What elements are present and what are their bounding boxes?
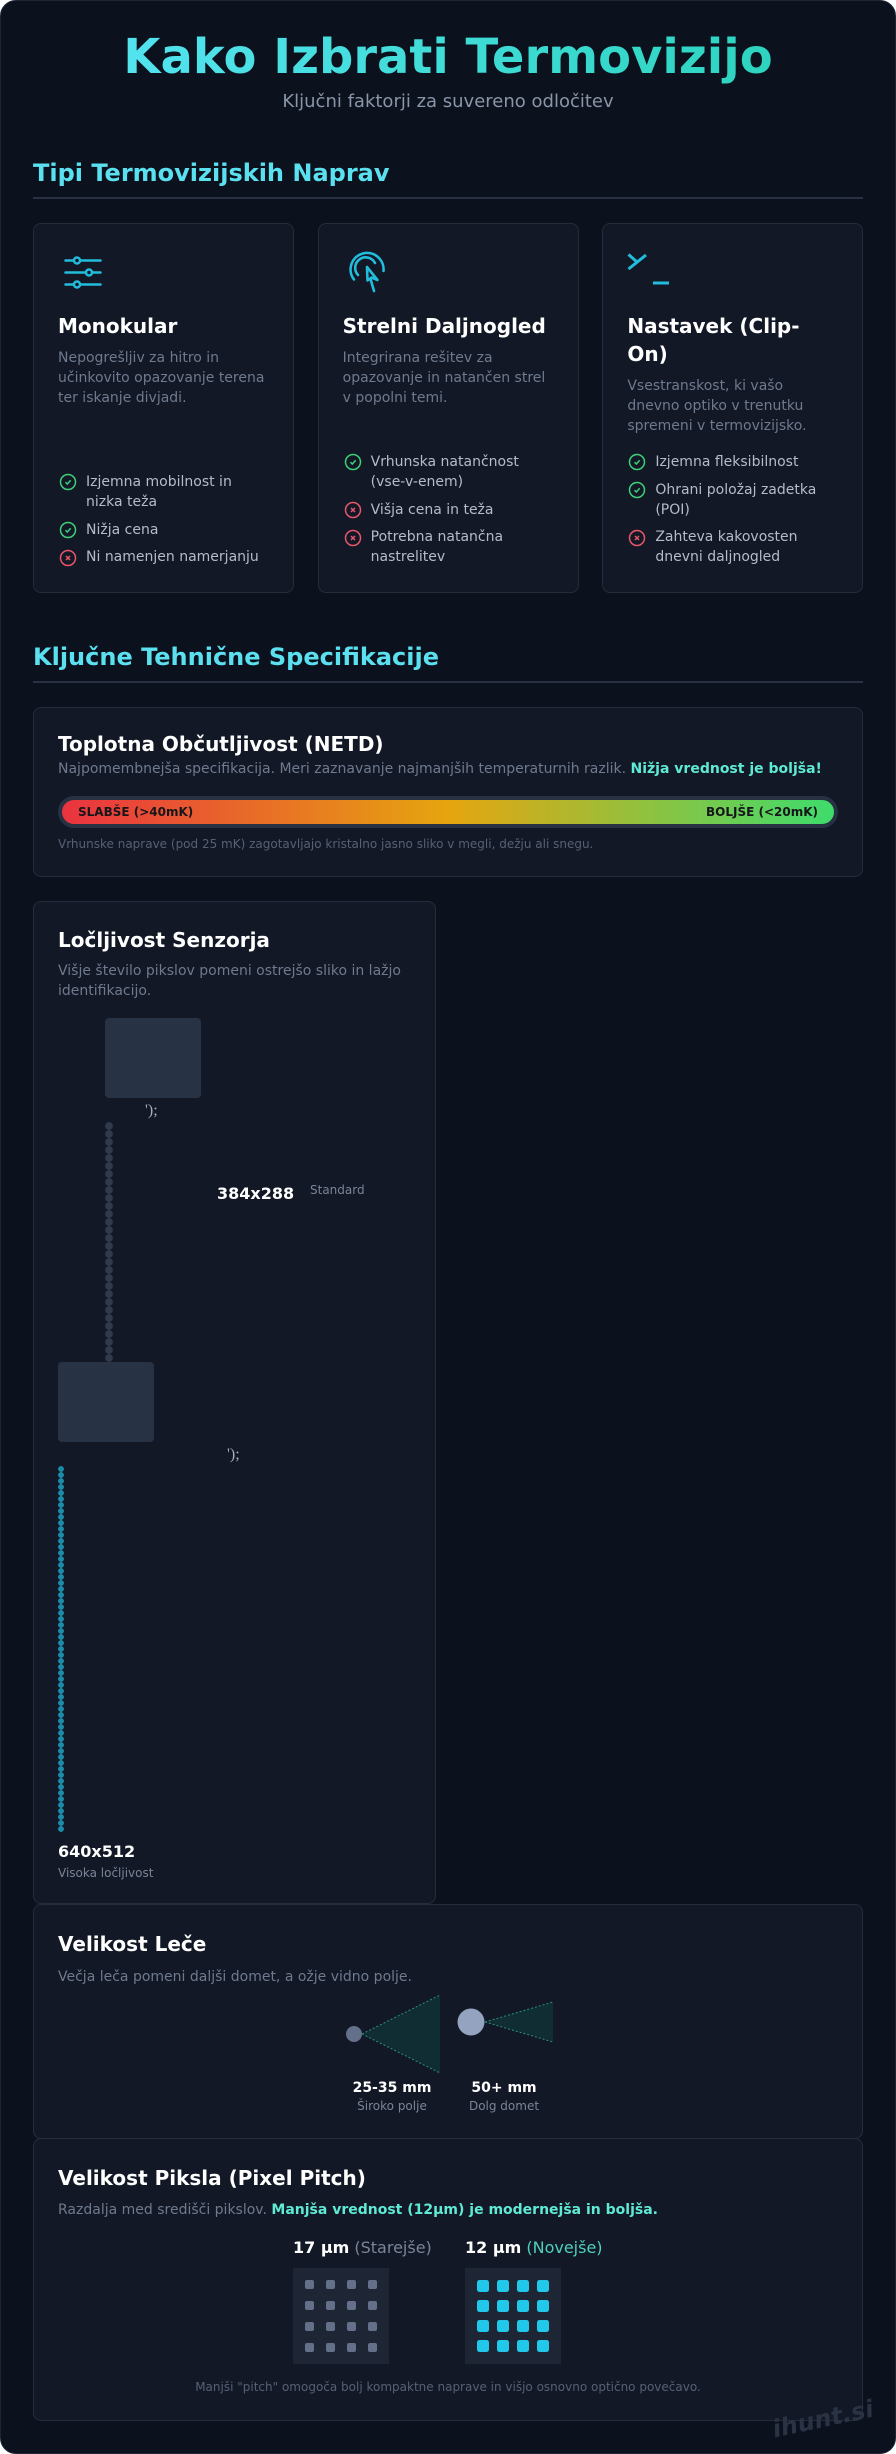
description: Nepogrešljiv za hitro in <box>58 350 219 366</box>
lens diagram: wide field <box>346 1995 440 2073</box>
list item: con <box>344 529 503 565</box>
sensor box 384x288 <box>105 1018 201 1098</box>
stray code text: '); <box>227 1446 240 1463</box>
caption Standard: Standard <box>310 1183 365 1197</box>
pixel column 640x512 <box>58 1466 64 1832</box>
list item: pro: Izjemna fleksibilnost <box>655 454 798 470</box>
panel: Monokular <box>33 223 294 593</box>
description <box>627 378 807 434</box>
gradient scale bar <box>58 796 838 828</box>
icon: target cursor <box>349 252 385 292</box>
note: Vrhunske naprave (pod 25 mK) zagotavljajo kristalno jasno sliko v megli, dežju ali snegu. <box>58 837 593 851</box>
caption high resolution: Visoka ločljivost <box>58 1866 153 1880</box>
panel: Strelni Daljnogled <box>318 223 579 593</box>
list item: pro: (POI) <box>655 502 690 518</box>
list item: con: Potrebna natančna <box>371 529 503 545</box>
panel title: Velikost Piksla (Pixel Pitch) <box>58 2166 366 2190</box>
description: Višje število pikslov pomeni ostrejšo sliko in lažjo <box>58 963 401 979</box>
watermark: ihunt.si <box>770 2395 876 2443</box>
heading: device types: Tipi Termovizijskih Naprav <box>33 159 390 187</box>
description: učinkovito opazovanje terena <box>58 370 264 386</box>
panel: NETD <box>33 707 863 877</box>
lens diagram: long range <box>458 2002 553 2042</box>
description: v popolni temi. <box>343 390 447 406</box>
panel title: Velikost Leče <box>58 1932 206 1956</box>
description: Večja leča pomeni daljši domet, a ožje vidno polje. <box>58 1969 412 1985</box>
description: identifikacijo. <box>58 983 151 999</box>
caption: long range: Dolg domet <box>469 2099 539 2113</box>
caption: wide field: Široko polje <box>357 2099 427 2113</box>
panel: sensor resolution <box>33 901 436 1904</box>
label: worse: SLABŠE (>40mK) <box>78 805 193 819</box>
description <box>58 963 401 999</box>
list item: pro <box>628 482 816 518</box>
description <box>343 350 545 406</box>
list item: con: dnevni daljnogled <box>655 549 780 565</box>
pixel grid: 12 um <box>465 2268 561 2364</box>
card title: Monokular <box>58 314 177 338</box>
card title: Strelni Daljnogled <box>343 314 546 338</box>
list item: con: Zahteva kakovosten <box>655 529 798 545</box>
description: Najpomembnejša specifikacija. Meri zaznavanje najmanjših temperaturnih razlik. Nižja vrednost je boljša! <box>58 761 822 777</box>
list item: pro: Ohrani položaj zadetka <box>655 482 816 498</box>
list item: pro: nizka teža <box>86 494 157 510</box>
list item: pro: Vrhunska natančnost <box>371 454 519 470</box>
description: dnevno optiko v trenutku <box>627 398 803 414</box>
card title <box>627 314 800 366</box>
list item: pro: (vse-v-enem) <box>371 474 463 490</box>
stray code text: '); <box>145 1102 158 1119</box>
card title: On) <box>627 342 668 366</box>
list item: pro <box>60 522 158 538</box>
description: spremeni v termovizijsko. <box>627 418 807 434</box>
pixel column 384x288 <box>105 1122 113 1362</box>
description: ter iskanje divjadi. <box>58 390 187 406</box>
description: Vsestranskost, ki vašo <box>627 378 783 394</box>
list item: pro <box>344 454 519 490</box>
title: Kako Izbrati Termovizijo <box>123 29 773 85</box>
description: Razdalja med središči pikslov. Manjša vrednost (12µm) je modernejša in boljša. <box>58 2202 658 2218</box>
footnote: Manjši "pitch" omogoča bolj kompaktne naprave in višjo osnovno optično povečavo. <box>195 2380 701 2394</box>
heading: key specifications: Ključne Tehnične Specifikacije <box>33 643 439 671</box>
subtitle: Ključni faktorji za suvereno odločitev <box>282 91 614 112</box>
description: opazovanje in natančen strel <box>343 370 545 386</box>
list item: pro: Nižja cena <box>86 522 158 538</box>
panel title: Toplotna Občutljivost (NETD) <box>58 732 384 756</box>
list item: con: nastrelitev <box>371 549 445 565</box>
label: 17 um: 17 µm (Starejše) <box>293 2238 432 2257</box>
label 384x288: 384x288 <box>217 1184 294 1203</box>
list item: pro <box>60 474 232 510</box>
label: 50+ mm: 50+ mm <box>471 2080 537 2096</box>
label 640x512: 640x512 <box>58 1842 135 1861</box>
description <box>58 350 264 406</box>
label: better: BOLJŠE (<20mK) <box>706 805 818 819</box>
pixel grid: 17 um <box>293 2268 389 2364</box>
list item: con: Višja cena in teža <box>371 502 493 518</box>
panel title: Ločljivost Senzorja <box>58 928 270 952</box>
list item: con: Ni namenjen namerjanju <box>86 549 259 565</box>
card title: Nastavek (Clip- <box>627 314 800 338</box>
list item: con <box>628 529 798 565</box>
label: 25-35 mm: 25-35 mm <box>353 2080 431 2096</box>
description: Integrirana rešitev za <box>343 350 493 366</box>
panel: lens size <box>33 1904 863 2139</box>
icon: sliders <box>64 256 102 289</box>
icon: clip-on <box>628 254 669 284</box>
panel: Nastavek <box>602 223 863 593</box>
list item: pro: Izjemna mobilnost in <box>86 474 232 490</box>
panel: pixel pitch <box>33 2138 863 2421</box>
sensor box 640x512 <box>58 1362 154 1442</box>
label: 12 um: 12 µm (Novejše) <box>465 2238 603 2257</box>
